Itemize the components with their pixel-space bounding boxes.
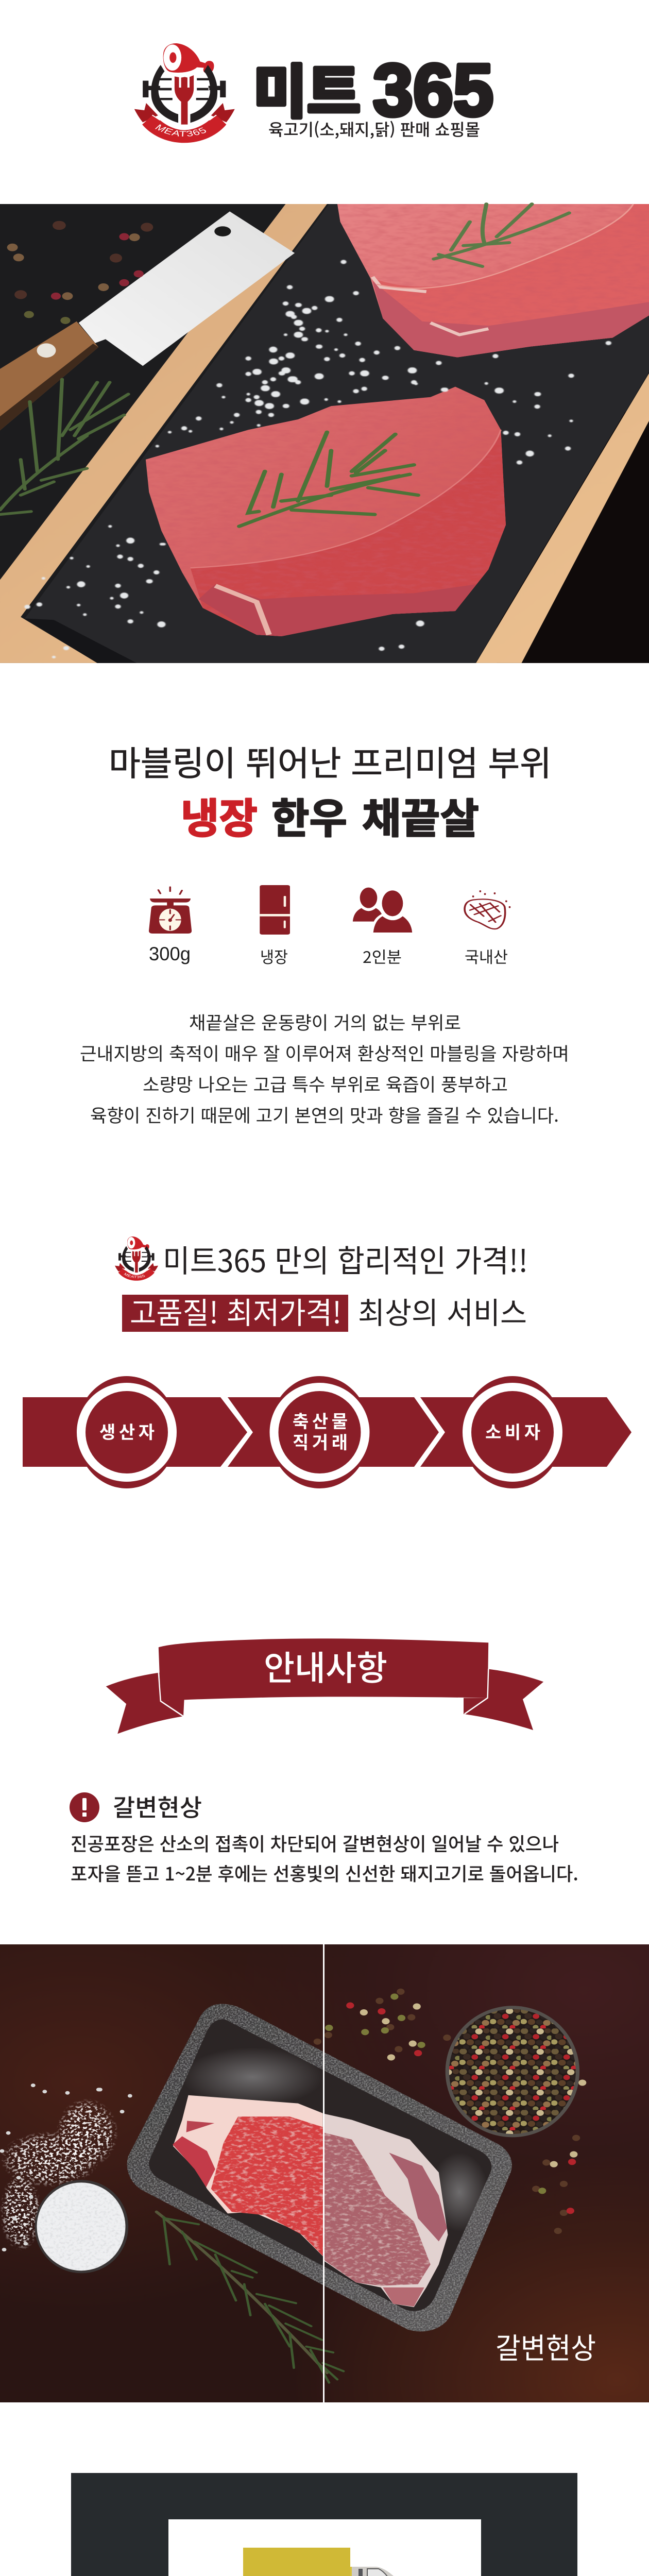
browning notice <box>70 1789 578 1886</box>
headline line 2: 한우 <box>271 786 347 845</box>
bottom steak <box>146 387 506 636</box>
header: brand logo <box>134 43 493 143</box>
icon: kitchen scale <box>149 887 192 934</box>
small logo <box>115 1236 158 1281</box>
headline line 2: 채끝살 <box>362 786 479 845</box>
peppercorn bowl <box>446 2006 579 2137</box>
icon: steak <box>465 891 509 929</box>
headline line 1: 마블링이 뛰어난 프리미엄 부위 <box>109 736 552 786</box>
photo caption: 갈변현상 <box>496 2326 596 2367</box>
notice body: 진공포장은 산소의 접촉이 차단되어 갈변현상이 일어날 수 있으나 <box>71 1829 559 1856</box>
knife <box>0 211 295 430</box>
notice body <box>71 1829 578 1886</box>
center divider <box>323 1944 324 2402</box>
product description: 근내지방의 축적이 매우 잘 이루어져 환상적인 마블링을 자랑하며 <box>80 1040 569 1066</box>
headline line 2: 냉장 <box>181 786 258 845</box>
foam tray <box>127 2004 512 2331</box>
ribbon shape <box>106 1638 543 1734</box>
salt crystals <box>27 262 608 657</box>
label: chilled: 냉장 <box>260 944 288 968</box>
ribbon text: 안내사항 <box>264 1641 387 1690</box>
node: consumer <box>462 1376 563 1488</box>
browned meat half <box>315 2112 448 2307</box>
node: livestock direct trade <box>269 1376 370 1488</box>
notice body: 포자을 뜯고 1~2분 후에는 선홍빛의 신선한 돼지고기로 돌어옵니다. <box>71 1859 578 1886</box>
headline <box>109 736 552 845</box>
product description <box>80 1009 569 1128</box>
icon: warning <box>70 1792 99 1822</box>
shipping panel <box>71 2473 577 2576</box>
label: weight: 300g <box>149 943 191 964</box>
notice ribbon heading <box>106 1638 543 1734</box>
wooden board <box>0 204 649 663</box>
hero photo: beef on slate board <box>0 204 649 663</box>
service text: 최상의 서비스 <box>358 1289 527 1332</box>
price heading line: 미트365 만의 합리적인 가격!! <box>163 1236 528 1281</box>
small logo: MEAT365 <box>124 1273 145 1278</box>
peppercorns <box>12 226 147 320</box>
brand tagline: 육고기(소,돼지,닭) 판매 쇼핑몰 <box>268 117 480 141</box>
product facts icon row <box>149 885 509 968</box>
brand name <box>253 46 493 131</box>
node: livestock direct trade: 축산물 <box>293 1408 348 1433</box>
brand name: 365 <box>373 49 493 131</box>
product description: 육향이 진하기 때문에 고기 본연의 맛과 향을 즐길 수 있습니다. <box>90 1101 559 1128</box>
browning comparison photo <box>0 1944 649 2402</box>
icon: refrigerator <box>260 885 290 935</box>
label: servings: 2인분 <box>363 944 402 968</box>
slate <box>25 204 649 663</box>
rosemary sprigs <box>0 204 569 527</box>
logo emblem <box>134 43 235 143</box>
node: livestock direct trade: 직거래 <box>293 1429 348 1454</box>
node: producer: 생산자 <box>99 1418 155 1444</box>
logo emblem: MEAT365 <box>155 124 206 137</box>
scattered peppercorns <box>317 1992 583 2231</box>
icon: two people <box>353 888 412 933</box>
label: origin: 국내산 <box>465 944 508 968</box>
top steak <box>337 204 649 358</box>
truck picture <box>168 2519 481 2576</box>
direct trade arrow flow <box>23 1376 631 1488</box>
salt bowl and scatter <box>0 2086 130 2273</box>
fresh meat half <box>173 2095 331 2264</box>
node: consumer: 소비자 <box>485 1418 540 1444</box>
price heading <box>115 1236 528 1332</box>
highlight box: 고품질! 최저가격! <box>130 1289 341 1332</box>
product description: 소량망 나오는 고급 특수 부위로 육즙이 풍부하고 <box>143 1071 508 1097</box>
headline line 2 <box>181 786 479 845</box>
notice title: 갈변현상 <box>113 1789 202 1823</box>
product description: 채끝살은 운동량이 거의 없는 부위로 <box>189 1009 461 1035</box>
brand name: 미트 <box>253 46 361 129</box>
arrow band <box>23 1397 631 1467</box>
rosemary branch <box>157 2212 344 2383</box>
node: producer <box>76 1376 177 1488</box>
